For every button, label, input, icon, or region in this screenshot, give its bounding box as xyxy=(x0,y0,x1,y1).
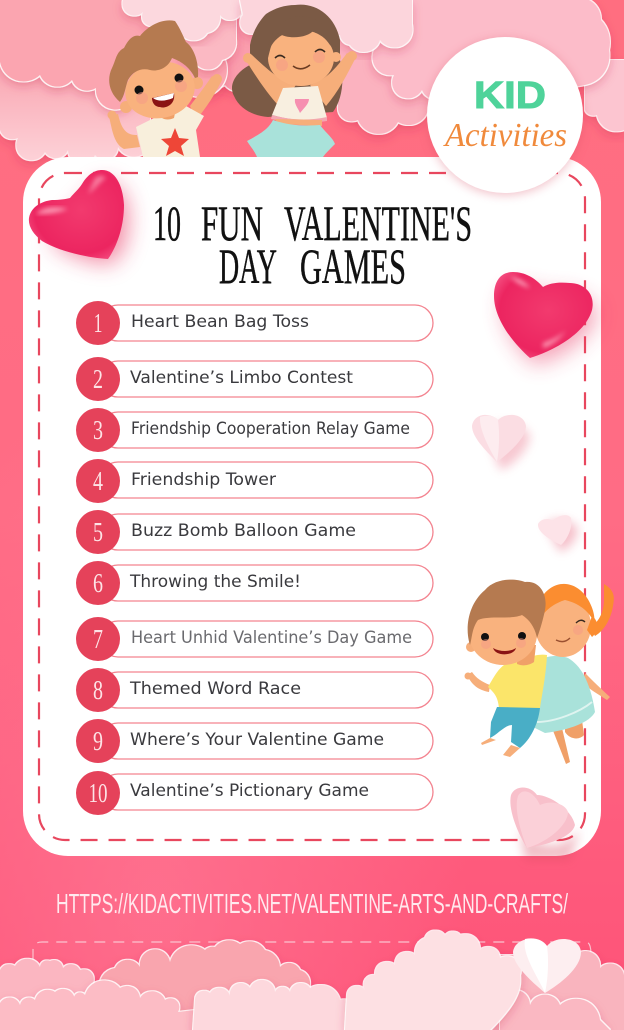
title: GAMES xyxy=(300,238,406,294)
logo badge: Activities xyxy=(443,117,567,154)
bottom dashed line xyxy=(33,942,591,960)
item 8: 8 xyxy=(93,675,103,705)
item 4: Friendship Tower xyxy=(131,470,276,490)
item 10: Valentine’s Pictionary Game xyxy=(130,781,369,801)
item 1: Heart Bean Bag Toss xyxy=(131,312,309,332)
item 9: Where’s Your Valentine Game xyxy=(130,730,384,750)
item 1 xyxy=(76,301,433,345)
logo badge: KID xyxy=(474,75,546,117)
item 10: 10 xyxy=(88,778,108,808)
title: DAY xyxy=(219,238,277,294)
item 4: 4 xyxy=(93,466,103,496)
item 3: 3 xyxy=(93,415,103,445)
item 3: Friendship Cooperation Relay Game xyxy=(131,419,410,439)
red heart right xyxy=(494,272,597,365)
item 7: 7 xyxy=(93,624,103,654)
item 5: 5 xyxy=(93,517,103,547)
item 2: 2 xyxy=(93,364,103,394)
title: VALENTINE'S xyxy=(284,195,472,251)
item 2 xyxy=(76,357,433,401)
item 6: Throwing the Smile! xyxy=(129,572,301,592)
item 5 xyxy=(76,510,433,554)
item 7 xyxy=(76,617,433,661)
item 5: Buzz Bomb Balloon Game xyxy=(131,521,356,541)
item 2: Valentine’s Limbo Contest xyxy=(130,368,353,388)
paper heart 3 xyxy=(472,415,530,470)
item 6 xyxy=(76,561,433,605)
boy top xyxy=(108,20,222,157)
item 7: Heart Unhid Valentine’s Day Game xyxy=(131,628,412,648)
item 8: Themed Word Race xyxy=(129,679,301,699)
item 8 xyxy=(76,668,433,712)
title: FUN xyxy=(201,195,263,251)
white card xyxy=(23,157,601,856)
paper heart 5 xyxy=(510,788,580,860)
item 6: 6 xyxy=(93,568,103,598)
paper heart bottom xyxy=(513,938,581,993)
title xyxy=(153,195,472,294)
kids bottom right xyxy=(464,580,614,764)
logo badge xyxy=(427,37,583,195)
paper heart 4 xyxy=(538,515,578,552)
item 3 xyxy=(76,408,433,452)
top paper clouds xyxy=(0,0,624,164)
item 1: 1 xyxy=(94,308,102,338)
item 4 xyxy=(76,459,433,503)
bottom paper clouds xyxy=(0,930,624,1030)
stitched dashed border xyxy=(39,173,585,840)
red heart top left xyxy=(29,170,129,264)
girl top xyxy=(232,5,357,157)
title: 10 xyxy=(153,195,181,251)
item 9: 9 xyxy=(93,726,103,756)
item 9 xyxy=(76,719,433,763)
item 10 xyxy=(76,771,433,815)
